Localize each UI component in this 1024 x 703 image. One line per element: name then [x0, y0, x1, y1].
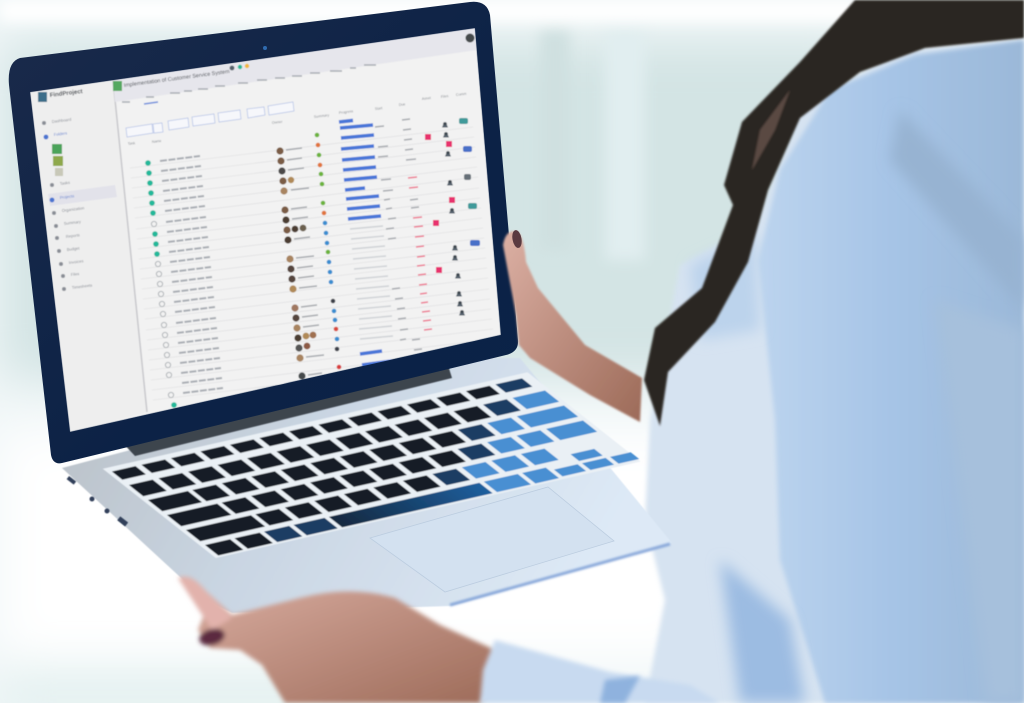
camera [263, 46, 267, 50]
sidebar menu [42, 117, 93, 291]
overdue dates in red [408, 177, 432, 330]
bottom row [205, 533, 273, 556]
column headings: Asset [422, 96, 431, 101]
due date column [402, 119, 422, 350]
column headings: Comm [456, 92, 467, 97]
number row [129, 406, 491, 496]
laptop base [62, 358, 672, 613]
sidebar menu: Folders [54, 130, 67, 137]
project title [113, 64, 249, 91]
progress bars empty [350, 226, 393, 339]
shirt folds [690, 110, 1024, 703]
column headings: Progress [339, 109, 354, 115]
shirt sleeve [758, 40, 1024, 703]
sidebar menu: Invoices [69, 258, 84, 265]
fingernail [511, 229, 523, 249]
left hand holding the laptop [178, 576, 510, 703]
front edge [450, 544, 670, 605]
date column [375, 126, 408, 340]
sidebar menu: Tasks [60, 180, 70, 186]
thumb [178, 576, 232, 630]
project thumbnails [52, 144, 63, 176]
side ports [67, 476, 128, 526]
blue lit keys [405, 389, 640, 493]
sidebar menu: Timesheets [72, 283, 93, 290]
function row [112, 386, 500, 480]
column headings: Due [399, 102, 406, 107]
sidebar menu: Files [71, 271, 80, 277]
shift row [186, 475, 441, 541]
sidebar highlight [48, 185, 117, 206]
user avatar [466, 34, 474, 42]
screen application [30, 28, 501, 432]
tab strip [122, 65, 376, 104]
shirt cuff [480, 640, 720, 703]
column headings: Name [152, 139, 162, 144]
assignee avatars [276, 147, 316, 380]
pink flag icons [425, 134, 455, 273]
task status dots [145, 160, 177, 408]
logo [38, 92, 47, 102]
trackpad [370, 487, 614, 592]
column headings: Summary [314, 113, 330, 119]
transition keys [171, 378, 628, 542]
column headings [128, 92, 467, 146]
keyboard [103, 372, 642, 558]
assignee names [286, 148, 324, 375]
qwerty row [148, 431, 466, 511]
header bar [113, 28, 477, 102]
painted fingernail [197, 626, 227, 648]
sidebar menu: Projects [60, 193, 74, 200]
shirt torso [645, 40, 1024, 703]
progress bars complete [339, 120, 392, 365]
laptop [9, 2, 672, 613]
project title: Implementation of Customer Service System [123, 69, 230, 89]
sidebar menu: Budget [67, 245, 81, 252]
right hand holding the lid [503, 229, 642, 422]
sidebar [30, 80, 147, 432]
laptop lid [9, 2, 518, 463]
priority tags [315, 133, 341, 369]
space bar [329, 483, 493, 527]
app name: FindProject [50, 89, 83, 99]
sidebar menu: Summary [64, 219, 81, 226]
woman's shirt [645, 40, 1024, 703]
fingers and palm [178, 576, 510, 703]
sidebar menu: Reports [66, 232, 80, 239]
woman's hair [644, 0, 1024, 426]
chat icons [459, 118, 480, 246]
empty task circles [151, 221, 174, 398]
column headings: Task [128, 141, 136, 146]
sidebar menu: Dashboard [52, 117, 72, 124]
column headings: Start [375, 106, 383, 111]
hinge [120, 362, 452, 456]
cuff fold [600, 676, 640, 703]
column headings: Owner [272, 120, 283, 125]
task table rows [160, 138, 480, 394]
people icons [442, 122, 465, 315]
column headings: Files [441, 94, 449, 99]
toolbar buttons [126, 102, 294, 137]
home row [167, 450, 466, 526]
sidebar menu: Organization [62, 205, 85, 213]
